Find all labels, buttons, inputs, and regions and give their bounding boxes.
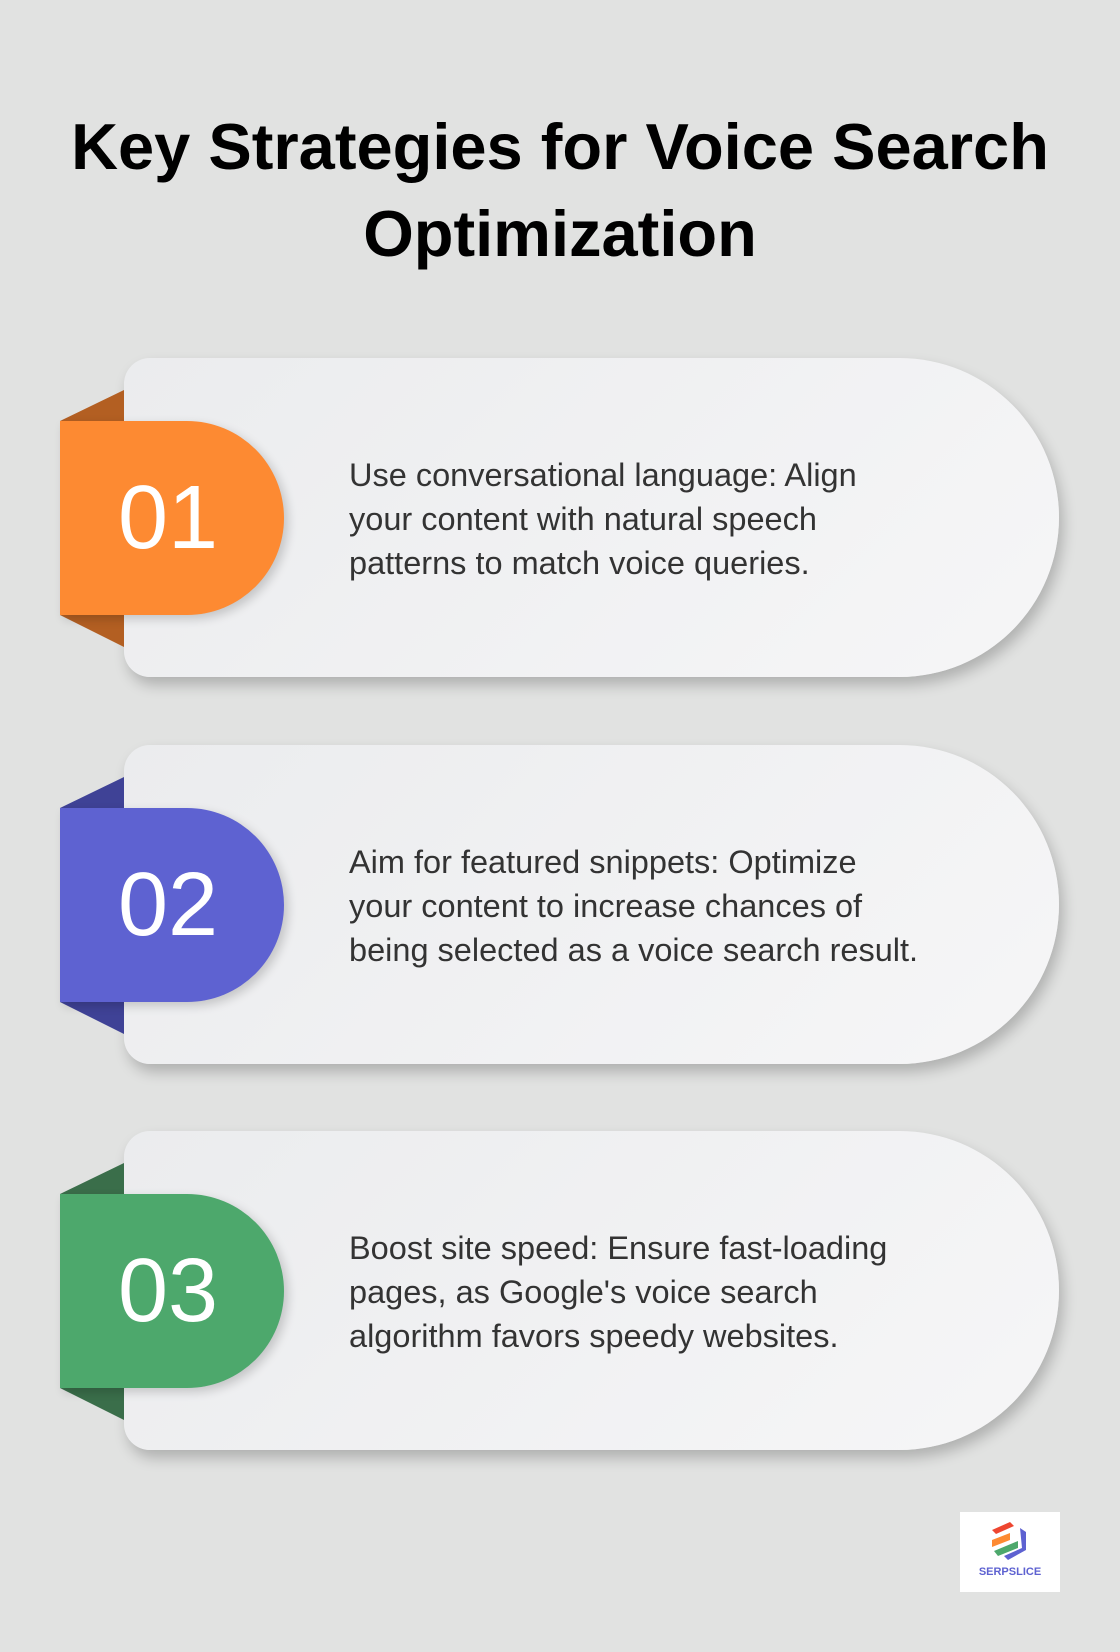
card 03 — [124, 1131, 1059, 1450]
card 02 — [124, 745, 1059, 1064]
text 01: Use conversational language: Align — [349, 457, 857, 493]
logo text: SERPSLICE — [979, 1566, 1041, 1578]
card 01 — [124, 358, 1059, 677]
logo — [960, 1512, 1060, 1592]
number 02: 02 — [118, 855, 218, 955]
text 02: being selected as a voice search result. — [349, 932, 918, 968]
panel: strategy 01 — [60, 358, 1069, 692]
text 02 — [349, 844, 918, 968]
text 01 — [349, 457, 857, 581]
text 03: Boost site speed: Ensure fast-loading — [349, 1230, 887, 1266]
fold 03 — [60, 1163, 124, 1420]
panel: strategy 03 — [60, 1131, 1069, 1464]
icon: logo mark — [992, 1522, 1026, 1560]
title: Optimization — [363, 197, 757, 270]
text 03: algorithm favors speedy websites. — [349, 1318, 839, 1354]
title — [71, 110, 1049, 270]
number tab 03 — [60, 1194, 284, 1388]
text 01: your content with natural speech — [349, 501, 817, 537]
text 01: patterns to match voice queries. — [349, 545, 810, 581]
panel: strategy 02 — [60, 745, 1069, 1078]
text 03 — [349, 1230, 887, 1354]
fold 01 — [60, 390, 124, 647]
number tab 02 — [60, 808, 284, 1002]
number tab 01 — [60, 421, 284, 615]
text 02: Aim for featured snippets: Optimize — [349, 844, 857, 880]
number 03: 03 — [118, 1241, 218, 1341]
text 02: your content to increase chances of — [349, 888, 862, 924]
number 01: 01 — [118, 468, 218, 568]
title: Key Strategies for Voice Search — [71, 110, 1049, 183]
text 03: pages, as Google's voice search — [349, 1274, 818, 1310]
fold 02 — [60, 777, 124, 1034]
